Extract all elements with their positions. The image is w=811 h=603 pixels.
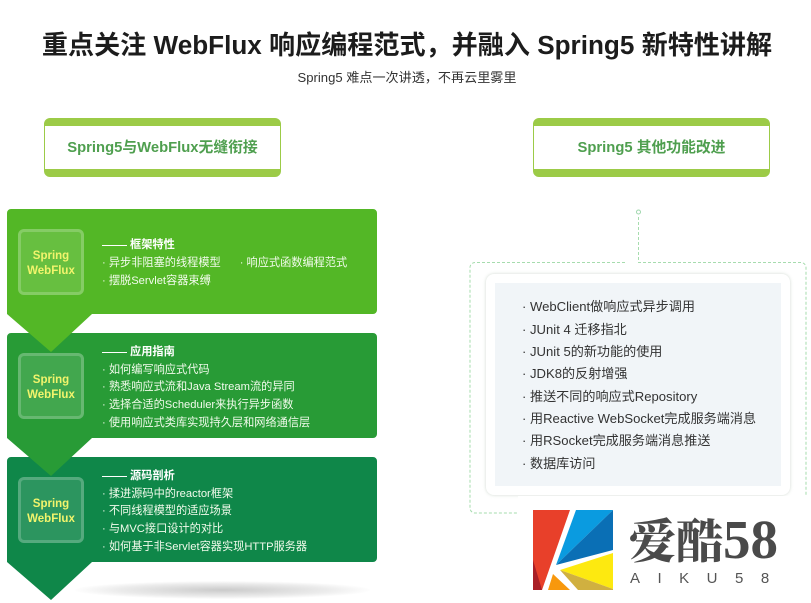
panel 1 text: 框架特性 — [130, 239, 175, 251]
badge 3 — [18, 477, 84, 543]
panel 3 text: 源码剖析 — [130, 470, 175, 482]
watermark latin text: AIKU58 — [630, 570, 787, 587]
feature list: · 用RSocket完成服务端消息推送 — [522, 433, 710, 448]
floor shadow — [75, 581, 370, 599]
heading button: right: Spring5 其他功能改进 — [578, 140, 725, 156]
panel 3 shape — [7, 457, 377, 600]
icon: watermark logo — [533, 510, 613, 590]
panel 3 text: · 如何基于非Servlet容器实现HTTP服务器 — [102, 541, 307, 553]
panel 1 shape — [7, 209, 377, 352]
panel 2 text: · 熟悉响应式流和Java Stream流的异同 — [102, 381, 295, 393]
feature list: · JDK8的反射增强 — [522, 366, 628, 381]
panel 2 text: 应用指南 — [130, 346, 175, 358]
badge 3: Spring — [33, 498, 69, 510]
panel 2 text — [102, 345, 310, 429]
badge 3: WebFlux — [27, 512, 75, 524]
panel 1 text: · 异步非阻塞的线程模型 · 响应式函数编程范式 — [102, 257, 347, 269]
badge 1: WebFlux — [27, 264, 75, 276]
badge 2: WebFlux — [27, 388, 75, 400]
subtitle: Spring5 难点一次讲透，不再云里雾里 — [298, 70, 516, 85]
panel 3 text: · 与MVC接口设计的对比 — [102, 523, 223, 535]
heading button: left — [44, 118, 281, 177]
panel 2 text: · 使用响应式类库实现持久层和网络通信层 — [102, 417, 310, 429]
panel 3 text: · 不同线程模型的适应场景 — [102, 505, 232, 517]
feature list: · JUnit 5的新功能的使用 — [522, 344, 662, 359]
badge 1: Spring — [33, 250, 69, 262]
title: 重点关注 WebFlux 响应编程范式，并融入 Spring5 新特性讲解 — [42, 30, 772, 60]
feature list: · 推送不同的响应式Repository — [522, 389, 697, 404]
panel 2 text: · 选择合适的Scheduler来执行异步函数 — [102, 399, 293, 411]
panel: framework features — [7, 209, 377, 352]
feature list: · JUnit 4 迁移指北 — [522, 322, 627, 337]
panel 1 text — [102, 238, 347, 287]
panel 1 text: · 摆脱Servlet容器束缚 — [102, 275, 211, 287]
panel 2 shape — [7, 333, 377, 476]
feature list: · WebClient做响应式异步调用 — [522, 299, 695, 314]
panel 3 text: · 揉进源码中的reactor框架 — [102, 488, 233, 500]
panel: source code analysis — [7, 457, 377, 600]
panel 3 text — [102, 469, 307, 553]
badge 1 — [18, 229, 84, 295]
heading button: left: Spring5与WebFlux无缝衔接 — [67, 140, 258, 156]
panel: application guide — [7, 333, 377, 476]
watermark backdrop — [518, 496, 811, 603]
dashed connector and frame — [470, 210, 806, 514]
watermark text: 爱酷58 — [629, 505, 778, 572]
panel 2 text: · 如何编写响应式代码 — [102, 364, 210, 376]
feature list: · 用Reactive WebSocket完成服务端消息 — [522, 411, 756, 426]
badge 2: Spring — [33, 374, 69, 386]
heading button: right — [533, 118, 770, 177]
badge 2 — [18, 353, 84, 419]
feature list: · 数据库访问 — [522, 456, 595, 471]
panel: other improvements — [486, 274, 790, 495]
